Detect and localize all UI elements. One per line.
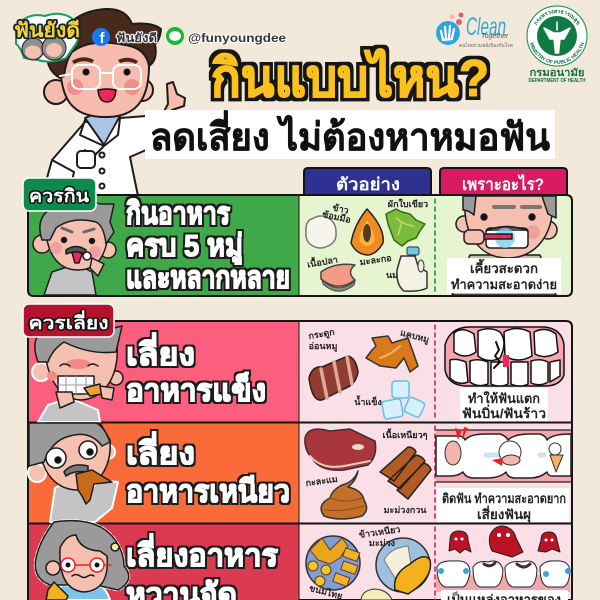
character: grandmother xyxy=(35,521,129,600)
logo: clean together: Together xyxy=(481,33,509,40)
divider: sweet xyxy=(434,527,436,600)
logo: clean together: Clean xyxy=(466,13,506,41)
logo: department of health xyxy=(526,6,588,84)
heading: eat all five groups xyxy=(126,196,290,295)
illustration: germs and decayed teeth xyxy=(436,526,571,592)
caption: easy to chew: เคี้ยวสะดวก xyxy=(470,258,538,276)
logo: department of health: MINISTRY OF PUBLIC HEALTH xyxy=(530,42,584,64)
caption: food stuck: ติดฟัน ทำความสะอาดยาก xyxy=(442,491,566,506)
heading: avoid sticky food: เลี่ยง xyxy=(126,431,195,471)
doctor face details xyxy=(60,57,141,102)
food examples: hard: น้ำแข็ง xyxy=(354,395,382,407)
food examples: sticky: กะละแม xyxy=(305,474,338,488)
panel: should eat xyxy=(28,195,572,296)
heading: avoid very sweet food xyxy=(126,533,278,600)
food examples: hard: อ่อนหมู xyxy=(309,341,337,352)
logo: ฟันยังดี: ฟันยังดี xyxy=(14,19,80,42)
divider: sticky xyxy=(434,426,436,520)
social links: @funyoungdee xyxy=(188,31,286,45)
badge: should eat: ควรกิน xyxy=(29,186,90,206)
tab: examples: ตัวอย่าง xyxy=(336,175,400,194)
food examples: hard: แคบหมู xyxy=(399,327,430,346)
food examples: sticky: เนื้อเหนียวๆ xyxy=(383,428,428,441)
caption: food stuck: เสี่ยงฟันผุ xyxy=(477,505,531,523)
food examples: sweet xyxy=(306,524,431,600)
food examples: healthy: ซ้อมมือ xyxy=(322,208,352,225)
heading: eat all five groups: กินอาหาร xyxy=(126,196,230,231)
food examples: hard: กระดูก xyxy=(308,327,336,342)
caption: cracked teeth: ฟันบิ่น/ฟันร้าว xyxy=(462,404,546,421)
food examples: sticky: มะม่วงกวน xyxy=(384,505,427,515)
character: grandfather eating xyxy=(33,200,116,295)
character: grandfather biting hard food xyxy=(32,326,123,422)
food examples: sticky xyxy=(305,428,431,519)
divider: healthy xyxy=(434,199,436,292)
heading: avoid hard food xyxy=(126,332,266,408)
divider: hard xyxy=(434,325,436,420)
badge: should avoid: ควรเลี่ยง xyxy=(28,310,109,333)
character: grandfather with sticky food xyxy=(28,423,118,522)
badge: should eat xyxy=(23,178,96,211)
logo: ฟันยังดี xyxy=(14,14,80,62)
food examples: healthy: มะละกอ xyxy=(359,253,392,267)
heading: avoid very sweet food: เลี่ยงอาหาร xyxy=(126,533,278,573)
tab: because xyxy=(440,168,567,197)
caption: cracked teeth: ทำให้ฟันแตก xyxy=(468,390,540,406)
tab: because: เพราะอะไร? xyxy=(462,174,544,194)
heading: eat all five groups: ครบ 5 หมู่ xyxy=(126,228,243,265)
caption: food stuck xyxy=(437,488,569,523)
social links: ฟันยังดี xyxy=(116,31,157,45)
subtitle: ลดเสี่ยง ไม่ต้องหาหมอฟัน xyxy=(150,110,550,159)
heading: avoid sticky food: อาหารเหนียว xyxy=(126,474,290,509)
food examples: healthy xyxy=(306,198,428,291)
caption: cracked teeth xyxy=(460,388,548,421)
character: grandfather brushing teeth xyxy=(452,196,557,295)
doctor character xyxy=(44,9,185,198)
food examples: healthy: ผักใบเขียว xyxy=(388,198,428,209)
logo: department of health: กรมอนามัย xyxy=(530,67,585,79)
food examples: healthy: นม xyxy=(386,270,398,280)
social links: f xyxy=(100,30,106,47)
tab: examples xyxy=(304,168,431,197)
heading: avoid sticky food xyxy=(126,431,290,509)
title: กินแบบไหน? xyxy=(211,48,489,108)
social links xyxy=(92,27,286,47)
food examples: sweet: มะม่วง xyxy=(369,538,395,548)
caption: easy to chew xyxy=(447,258,561,293)
illustration: food stuck in teeth xyxy=(436,427,571,482)
food examples: healthy: เนื้อปลา xyxy=(306,252,339,270)
badge: should avoid xyxy=(23,304,114,337)
food examples: hard xyxy=(308,327,430,419)
heading: avoid hard food: อาหารแข็ง xyxy=(126,371,266,408)
caption: easy to chew: ทำความสะอาดง่าย xyxy=(451,277,557,292)
food examples: sweet: ข้าวเหนียว xyxy=(358,524,401,540)
heading: eat all five groups: และหลากหลาย xyxy=(126,260,290,295)
illustration: cracked teeth xyxy=(445,327,564,386)
logo: department of health: กระทรวงสาธารณสุข xyxy=(534,10,580,26)
food examples: healthy: ข้าว xyxy=(332,202,350,216)
logo: department of health: DEPARTMENT OF HEALTH xyxy=(528,78,586,84)
heading: avoid hard food: เลี่ยง xyxy=(126,332,195,372)
panel: should avoid xyxy=(28,321,572,600)
logo: clean together xyxy=(436,12,513,49)
logo: clean together: คนไทยร่วมพลังป้องกันโรค xyxy=(459,42,513,49)
